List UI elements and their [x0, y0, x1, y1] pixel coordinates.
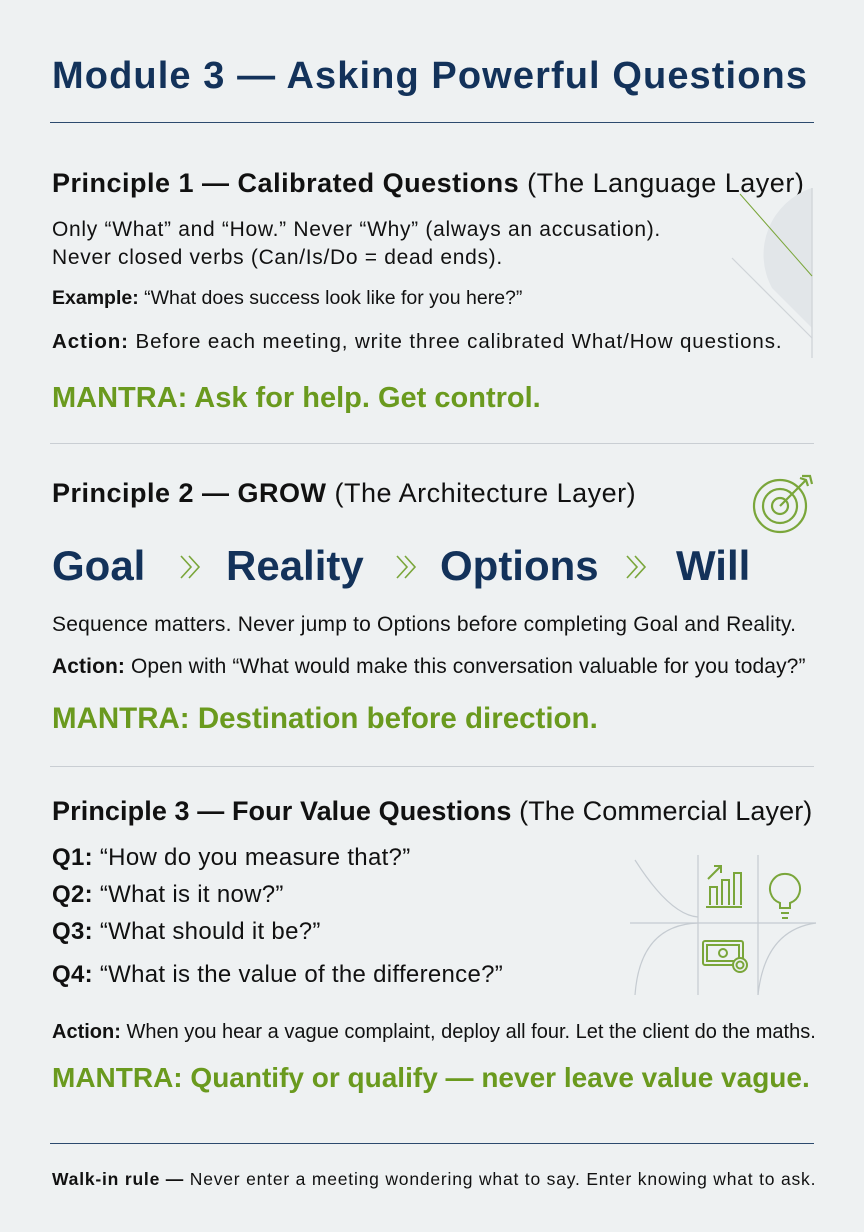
footer: walk-in rule: Walk-in rule — Never enter a meeting wondering what to say. Enter knowing what to ask.: [52, 1169, 816, 1189]
heading: principle 1: Principle 1 — Calibrated Questions (The Language Layer): [52, 168, 804, 198]
icon: decorative arc: [732, 188, 813, 358]
GROW sequence: Goal: [52, 542, 145, 589]
list: four questions: Q1: “How do you measure that?”: [52, 844, 411, 871]
text: principle 1 body: Never closed verbs (Can/Is/Do = dead ends).: [52, 246, 503, 269]
icon grid: chart, bulb, money: [630, 855, 816, 995]
list: four questions: Q3: “What should it be?”: [52, 918, 321, 945]
heading: principle 2: Principle 2 — GROW (The Architecture Layer): [52, 478, 636, 508]
GROW sequence: [52, 542, 750, 589]
title: Module 3 — Asking Powerful Questions: [52, 55, 808, 97]
text: principle 1 body: Only “What” and “How.” Never “Why” (always an accusation).: [52, 218, 661, 241]
list: four questions: Q4: “What is the value of the difference?”: [52, 961, 503, 988]
GROW sequence: Reality: [226, 542, 364, 589]
panel: principle 3: [52, 796, 816, 1093]
mantra 3: MANTRA: Quantify or qualify — never leave value vague.: [52, 1062, 810, 1093]
GROW sequence: Options: [440, 542, 599, 589]
icon: target: [752, 474, 813, 534]
text: sequence: Sequence matters. Never jump to Options before completing Goal and Reality.: [52, 613, 796, 636]
mantra 2: MANTRA: Destination before direction.: [52, 702, 598, 735]
GROW sequence: Will: [676, 542, 750, 589]
list: four questions: Q2: “What is it now?”: [52, 881, 284, 908]
text: example: Example: “What does success look like for you here?”: [52, 287, 522, 309]
heading: principle 3: Principle 3 — Four Value Questions (The Commercial Layer): [52, 796, 812, 826]
text: action 3: Action: When you hear a vague complaint, deploy all four. Let the client do the maths.: [52, 1021, 816, 1043]
list: four questions: [52, 844, 503, 988]
text: action 1: Action: Before each meeting, write three calibrated What/How questions.: [52, 330, 782, 353]
panel: principle 2: [52, 474, 813, 735]
text: action 2: Action: Open with “What would make this conversation valuable for you today?”: [52, 655, 806, 678]
mantra 1: MANTRA: Ask for help. Get control.: [52, 382, 541, 414]
panel: principle 1: [52, 168, 813, 414]
text: principle 1 body: [52, 218, 661, 269]
